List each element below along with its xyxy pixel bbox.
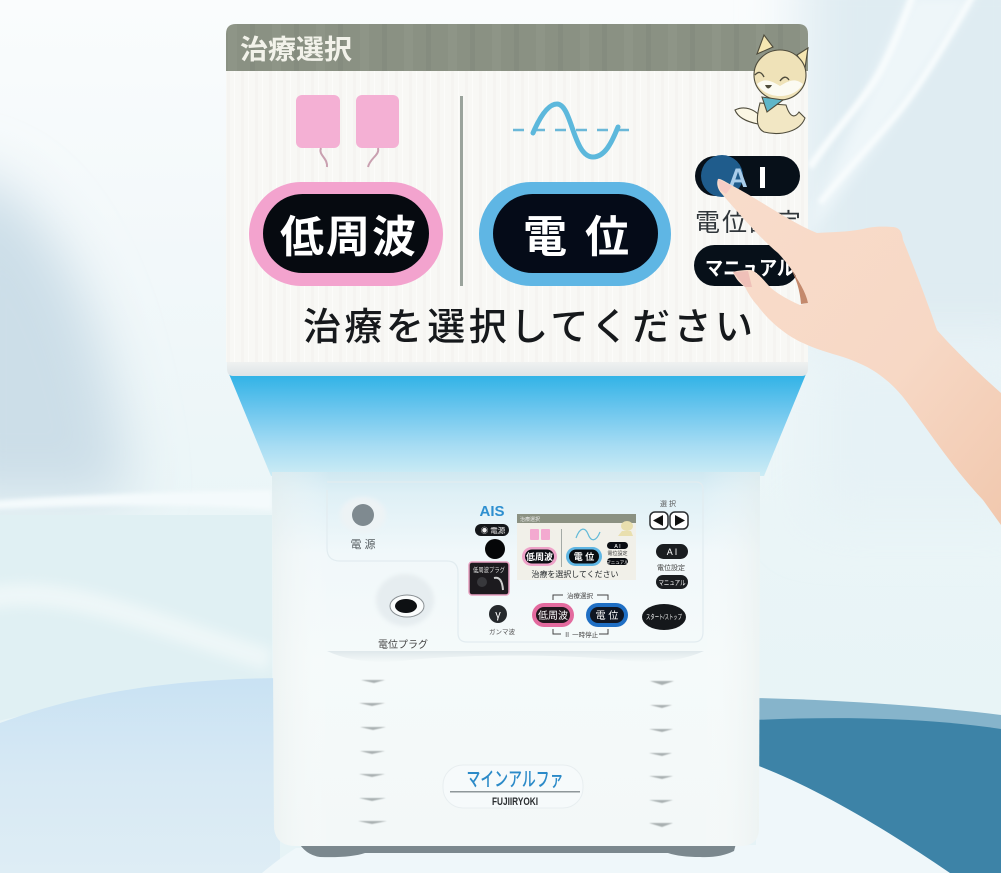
power button: 電 源 <box>350 537 376 551</box>
shading between thumb and finger <box>790 267 808 304</box>
control panel outlines <box>327 482 703 642</box>
button: manual: マニュアル <box>705 258 795 280</box>
power indicator pill <box>475 524 509 536</box>
floor: teal right disc <box>756 698 1001 873</box>
pause bracket: Ⅱ 一時停止 <box>564 630 599 639</box>
button: manual <box>694 245 799 286</box>
low frequency hardware button <box>532 603 574 627</box>
icon: pink electrode pads <box>296 95 399 167</box>
blue light beam <box>229 374 806 476</box>
button: electric potential: 電 位 <box>523 213 629 262</box>
icon: sine wave <box>513 104 638 157</box>
manual button small <box>656 575 688 589</box>
screen enlargement panel <box>226 24 808 476</box>
device body <box>272 472 760 857</box>
black round button <box>485 539 505 559</box>
button: low frequency <box>249 182 443 286</box>
mini screen <box>517 514 636 580</box>
gamma button: ガンマ波 <box>489 627 516 636</box>
mini screen: A I <box>614 544 621 550</box>
icon: cat mascot <box>735 35 808 133</box>
instruction text: 治療を選択してください <box>303 307 753 349</box>
control panel ledge <box>327 651 704 662</box>
low frequency hardware button: 低周波 <box>538 609 568 622</box>
screen title: 治療選択 <box>240 35 352 65</box>
mini screen: 電 位 <box>574 551 594 562</box>
treatment selection bracket: 治療選択 <box>567 591 594 600</box>
AIS logo: AIS <box>479 503 505 520</box>
floor: pale blue left disc <box>0 678 280 873</box>
label: potential setting: 電位設定 <box>695 209 801 237</box>
button: low frequency: 低周波 <box>280 213 416 262</box>
label: potential setting small: 電位設定 <box>657 563 685 572</box>
electric potential plug: 電位プラグ <box>378 638 428 651</box>
potential hardware button <box>586 603 628 627</box>
AI button small: A I <box>667 547 677 557</box>
mini screen: 治療を選択してください <box>532 569 618 579</box>
manual button small: マニュアル <box>658 579 686 587</box>
low frequency plug socket: 低周波プラグ <box>473 565 505 574</box>
mini screen: 治療選択 <box>520 516 540 523</box>
mini screen: 電位設定 <box>607 550 628 557</box>
thumb nail <box>733 271 752 287</box>
vents <box>358 680 674 827</box>
floor: white surface under device <box>262 765 950 873</box>
index fingernail <box>718 179 732 194</box>
hand pointing at AI button <box>717 179 1001 525</box>
divider <box>460 96 463 286</box>
power button <box>340 497 386 551</box>
screen title bar <box>226 24 808 71</box>
gamma button: γ <box>495 609 501 621</box>
screen bottom lip <box>227 360 808 376</box>
product badge: マインアルファ <box>466 769 564 791</box>
product badge: FUJIIRYOKI <box>492 796 538 808</box>
selection arrows <box>650 499 688 529</box>
button: AI <box>695 155 800 197</box>
screen background <box>226 60 808 362</box>
device feet <box>297 840 737 857</box>
button: AI: A <box>728 163 748 193</box>
pause bracket <box>553 629 608 639</box>
start stop button: スタート/ストップ <box>646 612 682 621</box>
electric potential plug <box>376 574 434 651</box>
potential hardware button: 電 位 <box>596 609 618 622</box>
selection arrows: 選 択 <box>660 499 676 508</box>
AI button small <box>656 544 688 559</box>
low frequency plug socket <box>469 562 509 595</box>
gamma button <box>489 605 516 636</box>
treatment selection bracket <box>553 591 608 600</box>
mini screen: 低周波 <box>526 551 553 562</box>
button: electric potential <box>479 182 671 286</box>
start stop button <box>642 604 686 630</box>
power indicator pill: ◉ 電源 <box>481 526 506 535</box>
mini screen: マニュアル <box>606 560 629 566</box>
product badge <box>443 765 583 808</box>
